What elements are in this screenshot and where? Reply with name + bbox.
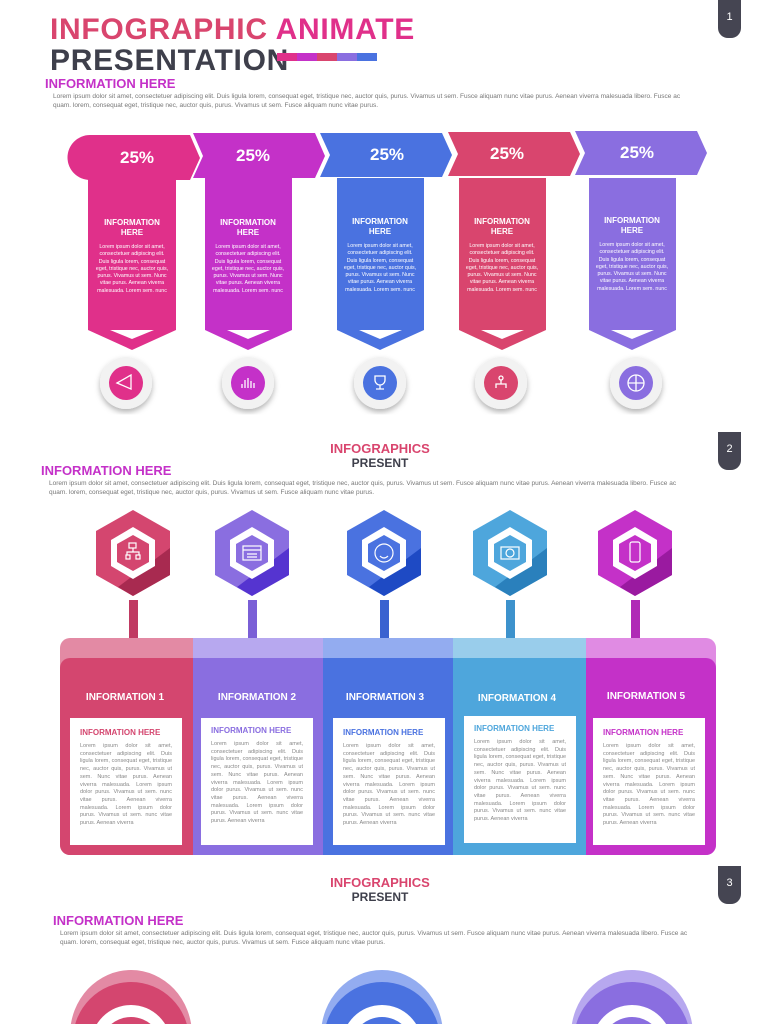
page tab 2: 2 bbox=[726, 443, 733, 455]
intro text 3: Lorem ipsum dolor sit amet, consectetuer adipiscing elit. Duis ligula lorem, consequat eget, tristique nec, auctor quis, purus. Vivamus ut sem. Fusce aliquam nunc vitae purus. Aenean viverra malesuada libero. Fusce ac quam. lorem, consequat eget, tristique nec, auctor quis, purus. Vivamus ut sem. Fusce aliquam nunc vitae purus. bbox=[60, 930, 687, 946]
section 2 title: PRESENT bbox=[352, 456, 408, 470]
section 3 circles bbox=[70, 970, 692, 1024]
panels bbox=[88, 178, 676, 350]
intro text 1: Lorem ipsum dolor sit amet, consectetuer adipiscing elit. Duis ligula lorem, consequat eget, tristique nec, auctor quis, purus. Vivamus ut sem. Fusce aliquam nunc vitae purus. Aenean viverra malesuada libero. Fusce ac quam. lorem, consequat eget, tristique nec, auctor quis, purus. Vivamus ut sem. Fusce aliquam nunc vitae purus. bbox=[53, 93, 680, 109]
text: INFORMATION HERE bbox=[220, 218, 276, 237]
text: INFORMATION 2 bbox=[218, 692, 296, 703]
white boxes: INFORMATION HERE bbox=[80, 728, 160, 737]
text: Lorem ipsum dolor sit amet, consectetuer adipiscing elit. Duis ligula lorem, consequat eget, tristique nec, auctor quis, purus. Vivamus ut sem. Nunc vitae purus. Aenean viverra malesuada. Lorem ipsum dolor purus. Vivamus ut sem. nunc vitae purus. Aenean viverra malesuada. Lorem ipsum dolor purus. Vivamus ut sem. nunc vitae purus. Aenean viverra bbox=[343, 743, 435, 826]
percent labels: 25% bbox=[120, 148, 154, 167]
section 2 graphic bbox=[60, 510, 716, 855]
text: 25% bbox=[620, 143, 654, 162]
white boxes bbox=[70, 718, 182, 845]
column headers: INFORMATION 1 bbox=[86, 692, 164, 703]
text: INFORMATION HERE bbox=[474, 724, 554, 733]
text: INFORMATION HERE bbox=[603, 728, 683, 737]
page tab 1: 1 bbox=[726, 11, 733, 23]
page tab 2 bbox=[718, 432, 741, 470]
text: Lorem ipsum dolor sit amet, consectetuer adipiscing elit. Duis ligula lorem, consequat eget, tristique nec, auctor quis, purus. Vivamus ut sem. Nunc vitae purus. Aenean viverra malesuada. Lorem ipsum dolor purus. Vivamus ut sem. nunc vitae purus. Aenean viverra malesuada. Lorem ipsum dolor purus. Vivamus ut sem. nunc vitae purus. Aenean viverra bbox=[474, 739, 566, 822]
title: INFOGRAPHIC ANIMATE bbox=[50, 13, 415, 46]
icon circles bbox=[100, 357, 662, 409]
title: PRESENTATION bbox=[50, 44, 289, 77]
section 3 title: PRESENT bbox=[352, 890, 408, 904]
text: Lorem ipsum dolor sit amet, consectetuer adipiscing elit. Duis ligula lorem, consequat eget, tristique nec, auctor quis, purus. Vivamus ut sem. Nunc vitae purus. Aenean viverra malesuada. Lorem ipsum dolor purus. Vivamus ut sem. nunc vitae purus. Aenean viverra malesuada. Lorem ipsum dolor purus. Vivamus ut sem. nunc vitae purus. Aenean viverra bbox=[211, 741, 303, 824]
text: INFORMATION 3 bbox=[346, 692, 424, 703]
white boxes: Lorem ipsum dolor sit amet, consectetuer adipiscing elit. Duis ligula lorem, consequat eget, tristique nec, auctor quis, purus. Vivamus ut sem. Nunc vitae purus. Aenean viverra malesuada. Lorem ipsum dolor purus. Vivamus ut sem. nunc vitae purus. Aenean viverra malesuada. Lorem ipsum dolor purus. Vivamus ut sem. nunc vitae purus. Aenean viverra bbox=[80, 743, 172, 826]
hexagons and stems bbox=[96, 510, 672, 640]
text: 25% bbox=[236, 146, 270, 165]
text: INFORMATION 4 bbox=[478, 693, 556, 704]
column texts: Lorem ipsum dolor sit amet, consectetuer adipiscing elit. Duis ligula lorem, consequat eget, tristique nec, auctor quis, purus. Vivamus ut sem. Nunc vitae purus. Aenean viverra malesuada. Lorem sem. nunc bbox=[96, 244, 168, 294]
heading: info 1: INFORMATION HERE bbox=[45, 76, 175, 91]
section 1 graphic bbox=[68, 131, 707, 414]
text: 25% bbox=[490, 144, 524, 163]
text: Lorem ipsum dolor sit amet, consectetuer adipiscing elit. Duis ligula lorem, consequat eget, tristique nec, auctor quis, purus. Vivamus ut sem. Nunc vitae purus. Aenean viverra malesuada. Lorem sem. nunc bbox=[344, 243, 416, 293]
text: Lorem ipsum dolor sit amet, consectetuer adipiscing elit. Duis ligula lorem, consequat eget, tristique nec, auctor quis, purus. Vivamus ut sem. Nunc vitae purus. Aenean viverra malesuada. Lorem sem. nunc bbox=[466, 243, 538, 293]
text: INFORMATION HERE bbox=[352, 217, 408, 236]
text: INFORMATION HERE bbox=[343, 728, 423, 737]
heading: info 3: INFORMATION HERE bbox=[53, 913, 183, 928]
text: Lorem ipsum dolor sit amet, consectetuer adipiscing elit. Duis ligula lorem, consequat eget, tristique nec, auctor quis, purus. Vivamus ut sem. Nunc vitae purus. Aenean viverra malesuada. Lorem sem. nunc bbox=[596, 242, 668, 292]
text: INFORMATION HERE bbox=[604, 216, 660, 235]
text: INFORMATION HERE bbox=[474, 217, 530, 236]
column texts: INFORMATION HERE bbox=[104, 218, 160, 237]
section 3 title bbox=[330, 875, 430, 904]
page tab 3 bbox=[718, 866, 741, 904]
text: Lorem ipsum dolor sit amet, consectetuer adipiscing elit. Duis ligula lorem, consequat eget, tristique nec, auctor quis, purus. Vivamus ut sem. Nunc vitae purus. Aenean viverra malesuada. Lorem ipsum dolor purus. Vivamus ut sem. nunc vitae purus. Aenean viverra malesuada. Lorem ipsum dolor purus. Vivamus ut sem. nunc vitae purus. Aenean viverra bbox=[603, 743, 695, 826]
column texts bbox=[96, 218, 168, 294]
text: 25% bbox=[370, 145, 404, 164]
table panels bbox=[60, 638, 716, 855]
arrows bbox=[68, 131, 707, 180]
text: INFORMATION HERE bbox=[211, 726, 291, 735]
intro text 2: Lorem ipsum dolor sit amet, consectetuer adipiscing elit. Duis ligula lorem, consequat eget, tristique nec, auctor quis, purus. Vivamus ut sem. Fusce aliquam nunc vitae purus. Aenean viverra malesuada libero. Fusce ac quam. lorem, consequat eget, tristique nec, auctor quis, purus. Vivamus ut sem. Fusce aliquam nunc vitae purus. bbox=[49, 480, 676, 496]
heading: info 2: INFORMATION HERE bbox=[41, 463, 171, 478]
section 2 title bbox=[330, 441, 430, 470]
color bar bbox=[277, 53, 377, 61]
page tab 3: 3 bbox=[726, 877, 733, 889]
section 3 title: INFOGRAPHICS bbox=[330, 875, 430, 890]
text: Lorem ipsum dolor sit amet, consectetuer adipiscing elit. Duis ligula lorem, consequat eget, tristique nec, auctor quis, purus. Vivamus ut sem. Nunc vitae purus. Aenean viverra malesuada. Lorem sem. nunc bbox=[212, 244, 284, 294]
title bbox=[50, 13, 415, 77]
page tab 1 bbox=[718, 0, 741, 38]
section 2 title: INFOGRAPHICS bbox=[330, 441, 430, 456]
text: INFORMATION 5 bbox=[607, 691, 685, 702]
